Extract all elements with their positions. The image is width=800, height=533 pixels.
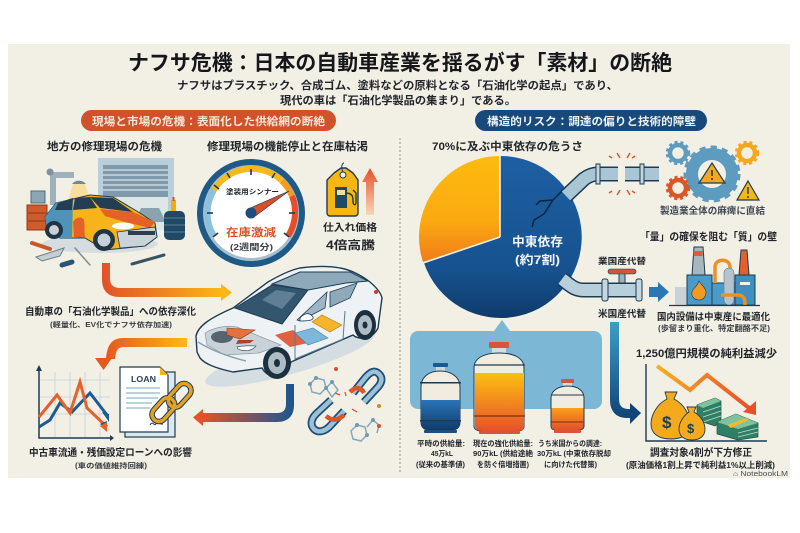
text: downward revisions xyxy=(626,446,775,470)
gauge: paint thinner stock: (2週間分) xyxy=(230,242,273,252)
subtitle xyxy=(177,78,618,107)
line chart: used car price xyxy=(36,365,114,441)
text: domestic equipment: 国内設備は中東産に最適化 xyxy=(657,311,770,323)
label: normal supply: 平時の供給量: xyxy=(417,438,465,448)
pie chart: Middle East share: 中東依存 xyxy=(512,234,563,249)
section pill: right: 構造的リスク：調達の偏りと技術的障壁 xyxy=(487,114,696,128)
arrow: repair to car xyxy=(102,263,232,301)
icon: loan document with chain xyxy=(120,367,194,437)
arrow: car to market xyxy=(95,338,187,370)
subtitle: ナフサはプラスチック、合成ゴム、塗料などの原料となる「石油化学の起点」であり、 xyxy=(177,78,618,92)
label: purchase price quadrupled xyxy=(323,221,377,252)
icon: valve pipe xyxy=(562,269,642,301)
chart: falling profit with money: $ xyxy=(687,421,695,436)
heading: Middle East dependence: 70%に及ぶ中東依存の危うさ xyxy=(432,139,583,153)
label: purchase price quadrupled: 仕入れ価格 xyxy=(323,221,377,234)
label: US procurement: 30万kL (中東依存脱却 xyxy=(537,448,611,458)
arrow: price rise xyxy=(362,168,378,215)
label: normal supply xyxy=(416,438,465,469)
label: US procurement: うち米国からの調達: xyxy=(538,438,602,448)
icon: gears with warnings xyxy=(667,142,759,200)
arrow: down to profit xyxy=(610,322,641,424)
illustration: cutaway electric car xyxy=(196,266,382,398)
heading: net profit decrease: 1,250億円規模の純利益減少 xyxy=(636,346,777,360)
icon: broken pipe xyxy=(566,153,659,196)
subtitle: 現代の車は「石油化学製品の集まり」である。 xyxy=(280,93,516,107)
text: used car and residual loans: 中古車流通・残価設定ローンへの影響 xyxy=(29,446,192,459)
label: enhanced supply: を防ぐ倍増措置) xyxy=(477,459,529,469)
icon: loan document with chain: LOAN xyxy=(131,375,156,384)
section pill: left xyxy=(81,110,336,131)
gauge: paint thinner stock: 在庫激減 xyxy=(226,225,276,239)
text: domestic equipment: (歩留まり重化、特定翻酪不足) xyxy=(658,323,770,333)
chart: falling profit with money xyxy=(646,364,767,441)
icon: tank enhanced xyxy=(474,342,525,434)
text: downward revisions: (原油価格1割上昇で純利益1%以上削減) xyxy=(626,460,775,470)
heading: regional repair shops: 地方の修理現場の危機 xyxy=(47,139,162,153)
text: used car and residual loans: (車の価値維持回練) xyxy=(75,461,147,470)
label: enhanced supply: 90万kL (供給途絶 xyxy=(473,448,534,458)
label: US procurement: に向けた代替策) xyxy=(544,459,597,469)
icon: price tag with fuel pump xyxy=(327,163,358,216)
icon: tank baseline xyxy=(420,363,461,433)
text: deepening dependence xyxy=(25,305,196,329)
callout: supply tanks background xyxy=(410,320,602,409)
text: deepening dependence: 自動車の「石油化学製品」への依存深化 xyxy=(25,305,196,318)
section pill: right xyxy=(475,110,707,131)
text: used car and residual loans xyxy=(29,446,192,470)
arrow: valve to factory xyxy=(649,282,669,302)
text: downward revisions: 調査対象4割が下方修正 xyxy=(650,446,752,459)
title: ナフサ危機：日本の自動車産業を揺るがす「素材」の断絶 xyxy=(128,51,672,75)
heading: quality wall: 「量」の確保を阻む「質」の壁 xyxy=(640,230,777,243)
watermark: NotebookLM: ⌂ NotebookLM xyxy=(733,471,788,478)
heading: repair shop shutdown: 修理現場の機能停止と在庫枯渇 xyxy=(207,139,368,153)
chart: falling profit with money: $ xyxy=(662,413,672,432)
icon: tank US xyxy=(551,379,584,433)
label: enhanced supply xyxy=(473,438,534,469)
background panel xyxy=(8,44,790,478)
gauge: paint thinner stock xyxy=(197,159,305,267)
label: domestic substitute: 業国産代替 xyxy=(598,256,647,266)
icon: factory xyxy=(669,247,760,306)
label: US procurement xyxy=(537,438,611,469)
label: manufacturing paralysis: 製造業全体の麻痺に直結 xyxy=(660,205,765,217)
label: US substitute: 米国産代替 xyxy=(598,308,646,320)
divider xyxy=(399,138,401,472)
text: domestic equipment xyxy=(657,311,770,333)
label: enhanced supply: 現在の強化供給量: xyxy=(473,438,533,448)
label: purchase price quadrupled: 4倍高騰 xyxy=(326,238,376,252)
gauge: paint thinner stock: 塗装用シンナー xyxy=(226,187,279,196)
pie chart: Middle East share xyxy=(419,156,582,318)
section pill: left: 現場と市場の危機：表面化した供給網の断絶 xyxy=(92,114,325,128)
pie chart: Middle East share: (約7割) xyxy=(515,252,560,267)
icon: broken chain and molecules xyxy=(308,367,381,441)
icon: repair shop with car xyxy=(27,158,185,265)
label: normal supply: (従来の基準値) xyxy=(416,459,465,469)
arrow: supply chain to loans xyxy=(193,384,294,426)
label: normal supply: 45万kL xyxy=(431,449,453,458)
text: deepening dependence: (軽量化、EV化でナフサ依存加速) xyxy=(50,320,172,329)
